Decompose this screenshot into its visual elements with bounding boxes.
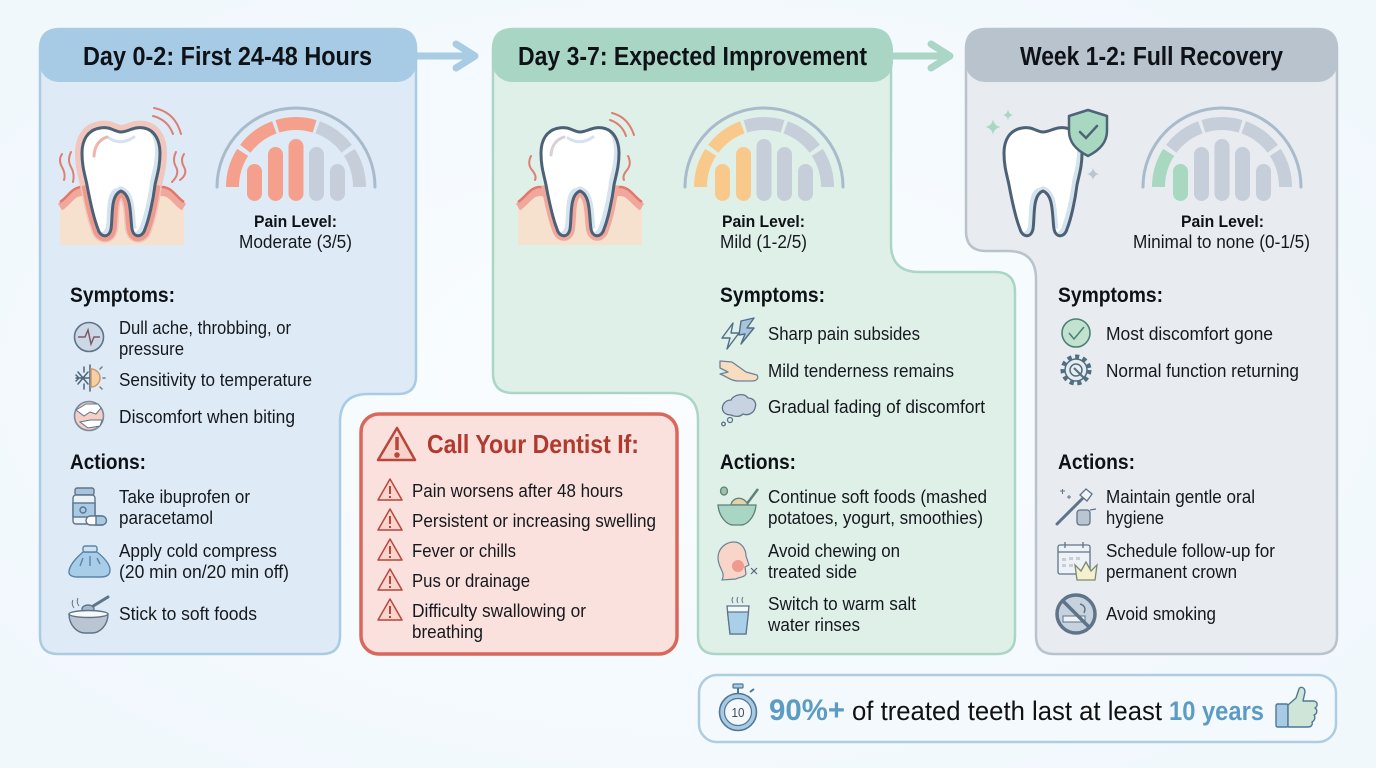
pain level label xyxy=(239,212,352,252)
pain level label: Moderate (3/5) xyxy=(239,231,352,252)
panel: week 1-2 xyxy=(965,29,1338,654)
chart: pain gauge minimal xyxy=(1143,108,1301,201)
icon: pill bottle xyxy=(73,488,106,525)
icon: painful tooth in gum xyxy=(60,108,185,245)
chart: pain gauge mild xyxy=(685,108,843,201)
icon: no smoking xyxy=(1057,595,1095,633)
icon: glass of warm water xyxy=(727,597,749,634)
icon: gear xyxy=(1063,357,1089,383)
arrow: day 3-7 to week 1-2 xyxy=(889,44,950,68)
action text continued: potatoes, yogurt, smoothies) xyxy=(768,507,983,528)
alert item 1: Pain worsens after 48 hours xyxy=(412,480,623,501)
panel 2 header bar xyxy=(492,29,893,82)
symptom text: Gradual fading of discomfort xyxy=(768,396,985,417)
panel: day 0-2 xyxy=(39,29,417,654)
symptoms heading: Symptoms: xyxy=(70,284,175,307)
icon: lightning bolts xyxy=(722,318,754,349)
actions heading: Actions: xyxy=(720,451,796,474)
icon: healthy tooth with shield xyxy=(985,110,1107,236)
panel 1 header bar xyxy=(39,29,417,82)
icon: face with sore cheek xyxy=(718,542,757,580)
panel: day 3-7 xyxy=(492,29,1015,654)
action text continued: (20 min on/20 min off) xyxy=(119,561,289,582)
alert item 5: Difficulty swallowing or xyxy=(412,600,586,621)
symptom text: Sensitivity to temperature xyxy=(119,369,312,390)
symptom text continued: pressure xyxy=(119,338,184,359)
icon: stopwatch: 10 xyxy=(732,705,744,720)
icon: improving tooth in gum xyxy=(518,113,642,245)
alert item 3 xyxy=(378,539,516,561)
action text continued: hygiene xyxy=(1106,507,1164,528)
callout: long term success xyxy=(699,675,1336,742)
action text: Switch to warm salt xyxy=(768,593,916,614)
callout text: of treated teeth last at least xyxy=(852,696,1162,726)
icon: hand xyxy=(720,361,758,381)
pain level label: Minimal to none (0-1/5) xyxy=(1133,231,1310,252)
action text: Avoid chewing on xyxy=(768,540,900,561)
panel 3 background xyxy=(966,29,1337,654)
icon: check circle xyxy=(1062,319,1090,347)
icon: thumbs up xyxy=(1276,687,1317,727)
panel 1 background xyxy=(40,29,416,654)
symptom text: Mild tenderness remains xyxy=(768,360,954,381)
icon: ice pack xyxy=(69,546,110,577)
icon: calendar and crown xyxy=(1058,542,1097,580)
action text: Apply cold compress xyxy=(119,540,277,561)
icon: soft food bowl xyxy=(718,487,758,525)
action text: Schedule follow-up for xyxy=(1106,540,1275,561)
symptoms heading: Symptoms: xyxy=(720,284,825,307)
icon: bowl with spoon xyxy=(69,597,108,633)
arrow: day 0-2 to day 3-7 xyxy=(414,44,475,68)
symptom text: Dull ache, throbbing, or xyxy=(119,317,291,338)
symptom text: Sharp pain subsides xyxy=(768,323,920,344)
alert heading: Call Your Dentist If: xyxy=(427,429,639,459)
action text: Continue soft foods (mashed xyxy=(768,486,987,507)
icon: large warning triangle xyxy=(378,428,415,460)
chart: pain gauge moderate xyxy=(217,108,375,201)
pain level label: Pain Level: xyxy=(722,212,805,231)
action text continued: water rinses xyxy=(767,614,860,635)
callout stat 90%+: 90%+ xyxy=(769,694,845,727)
alert item 3: Fever or chills xyxy=(412,540,516,561)
symptom text: Discomfort when biting xyxy=(119,406,295,427)
icon: temperature xyxy=(76,365,105,391)
pain level label xyxy=(1133,212,1310,252)
callout box xyxy=(699,675,1336,742)
pain level label: Mild (1-2/5) xyxy=(720,231,807,252)
panel 3 header bar xyxy=(965,29,1338,82)
callout stat 10 years: 10 years xyxy=(1169,696,1264,726)
panel 2 heading: Day 3-7: Expected Improvement xyxy=(518,43,867,71)
alert item 5: breathing xyxy=(412,621,483,642)
pain level label: Pain Level: xyxy=(254,212,337,231)
actions heading: Actions: xyxy=(70,451,146,474)
icon: stopwatch xyxy=(720,684,756,730)
action text continued: permanent crown xyxy=(1106,561,1237,582)
icon: thought cloud xyxy=(722,395,756,426)
action text: Take ibuprofen or xyxy=(119,486,250,507)
symptom text: Normal function returning xyxy=(1106,360,1299,381)
symptoms heading: Symptoms: xyxy=(1058,284,1163,307)
panel 1 heading: Day 0-2: First 24-48 Hours xyxy=(83,43,372,71)
alert item 4 xyxy=(378,569,530,591)
symptom text: Most discomfort gone xyxy=(1106,323,1273,344)
alert item 5 xyxy=(378,599,586,642)
action text continued: paracetamol xyxy=(119,507,213,528)
alert background xyxy=(361,414,677,654)
icon: pulse xyxy=(74,322,104,352)
panel 3 heading: Week 1-2: Full Recovery xyxy=(1020,43,1284,71)
pain level label xyxy=(720,212,807,252)
action text continued: treated side xyxy=(768,561,857,582)
actions heading: Actions: xyxy=(1058,451,1135,474)
icon: toothbrush and floss xyxy=(1057,489,1096,525)
alert item 2: Persistent or increasing swelling xyxy=(412,510,656,531)
action text: Avoid smoking xyxy=(1106,603,1216,624)
alert item 4: Pus or drainage xyxy=(412,570,530,591)
icon: biting xyxy=(74,402,104,430)
action text: Maintain gentle oral xyxy=(1106,486,1255,507)
action text: Stick to soft foods xyxy=(119,603,257,624)
panel: call your dentist alert xyxy=(361,414,677,654)
pain level label: Pain Level: xyxy=(1181,212,1264,231)
panel 2 background xyxy=(493,29,1015,654)
